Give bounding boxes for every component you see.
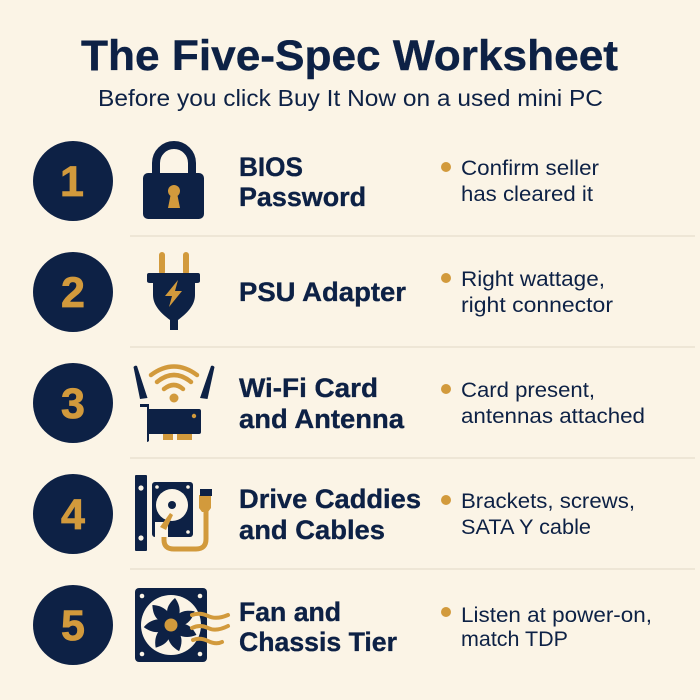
heading: BIOS Password [239, 152, 366, 212]
number badge 4: 4 [61, 491, 85, 539]
number badge 3: 3 [61, 380, 85, 428]
bullet: Confirm seller has cleared it: has cleared it [461, 183, 593, 206]
title: The Five-Spec Worksheet [81, 32, 618, 80]
row 2: PSU adapter [33, 252, 613, 332]
number badge 4 [33, 474, 113, 554]
bullet: Brackets, screws, SATA Y cable: Brackets, screws, [461, 490, 635, 513]
bullet: Right wattage, right connector: right connector [461, 294, 613, 317]
subtitle: Before you click Buy It Now on a used mini PC [98, 85, 603, 111]
bullet: Listen at power-on, match TDP [441, 604, 652, 651]
icon: hard drive, bracket and cable [135, 475, 212, 551]
icon: padlock [143, 145, 204, 219]
number badge 1: 1 [60, 158, 84, 206]
row 1: BIOS password [33, 141, 599, 221]
number badge 3 [33, 363, 113, 443]
heading: Drive Caddies and Cables [239, 484, 421, 545]
number badge 5 [33, 585, 113, 665]
bullet: Card present, antennas attached: Card present, [461, 379, 595, 402]
heading: BIOS Password: BIOS [239, 152, 303, 182]
number badge 5: 5 [61, 602, 85, 650]
heading: Drive Caddies and Cables: Drive Caddies [239, 484, 421, 514]
heading: Wi-Fi Card and Antenna: and Antenna [239, 404, 405, 434]
bullet: Confirm seller has cleared it [441, 157, 599, 206]
heading: PSU Adapter: PSU Adapter [239, 277, 407, 307]
row 3: Wi-Fi card [33, 363, 645, 443]
heading: BIOS Password: Password [239, 182, 366, 212]
bullet: Brackets, screws, SATA Y cable: SATA Y cable [461, 516, 591, 539]
bullet: Card present, antennas attached: antennas attached [461, 405, 645, 428]
number badge 2: 2 [61, 269, 85, 317]
bullet: Right wattage, right connector [441, 268, 613, 317]
bullet: Listen at power-on, match TDP: Listen at power-on, [461, 604, 652, 627]
icon: fan with airflow lines [135, 588, 228, 662]
bullet: Confirm seller has cleared it: Confirm seller [461, 157, 599, 180]
heading: Drive Caddies and Cables: and Cables [239, 515, 385, 545]
bullet: Brackets, screws, SATA Y cable [441, 490, 635, 539]
row 4: drive caddies [33, 474, 635, 554]
bullet: Right wattage, right connector: Right wattage, [461, 268, 605, 291]
icon: Wi-Fi card with antennas [134, 366, 214, 442]
heading: Fan and Chassis Tier: Fan and [239, 597, 341, 627]
number badge 2 [33, 252, 113, 332]
number badge 1 [33, 141, 113, 221]
heading: Wi-Fi Card and Antenna: Wi-Fi Card [239, 373, 378, 403]
heading: Wi-Fi Card and Antenna [239, 373, 405, 434]
row 5: fan and chassis [33, 585, 652, 665]
heading: Fan and Chassis Tier: Chassis Tier [239, 627, 397, 657]
icon: power plug [147, 252, 200, 330]
bullet: Card present, antennas attached [441, 379, 645, 428]
bullet: Listen at power-on, match TDP: match TDP [461, 628, 568, 651]
heading: Fan and Chassis Tier [239, 597, 397, 657]
